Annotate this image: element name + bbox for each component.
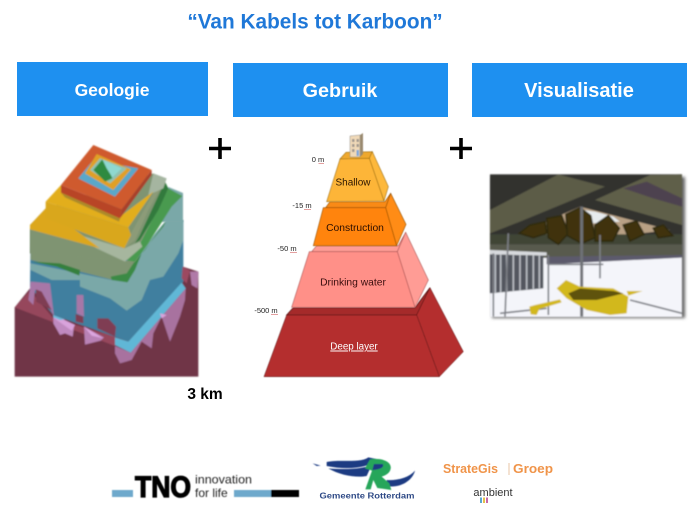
logo: StrateGis Groep: StrateGis (443, 462, 498, 476)
depth label: -15 m: -15 m (292, 201, 312, 210)
depth label: -50 m: -50 m (277, 244, 297, 253)
panel header: Geologie (17, 62, 208, 116)
visualisation screenshot (490, 174, 685, 318)
logo: Gemeente Rotterdam (313, 457, 415, 500)
layer: construction (313, 193, 406, 246)
layer: shallow (327, 152, 388, 202)
panel header: Gebruik (233, 63, 448, 117)
logo: TNO innovation for life (112, 471, 299, 504)
panel header: Gebruik: Gebruik (303, 80, 378, 102)
logo: TNO innovation for life: innovation (195, 472, 252, 486)
upper strata (30, 145, 183, 262)
panel header: Visualisatie: Visualisatie (524, 80, 634, 102)
title: “Van Kabels tot Karboon” (187, 10, 443, 34)
logo: ambient: ambient (473, 487, 513, 499)
label: Shallow: Shallow (335, 178, 371, 188)
icon: building (350, 133, 363, 157)
usage pyramid (254, 133, 463, 377)
logo: TNO innovation for life: for life (195, 486, 228, 500)
label: Construction: Construction (326, 223, 384, 234)
logo: StrateGis Groep: Groep (513, 462, 553, 476)
panel header: Visualisatie (472, 63, 687, 117)
logo: TNO innovation for life: TNO (135, 471, 191, 504)
depth label: 0 m: 0 m (312, 155, 324, 164)
depth label: -500 m: -500 m (254, 306, 278, 315)
logo: StrateGis Groep (443, 462, 553, 476)
layer: drinking water (292, 232, 428, 307)
layer: deep (264, 288, 463, 377)
label: Deep layer: Deep layer (330, 342, 378, 352)
plus sign 2 (450, 138, 472, 159)
lower strata and base (15, 220, 198, 377)
plus sign 1 (209, 138, 231, 159)
scale label: 3 km: 3 km (187, 386, 223, 403)
geology block diagram (15, 145, 198, 377)
logo: Gemeente Rotterdam: Gemeente Rotterdam (320, 492, 414, 500)
panel header: Geologie: Geologie (75, 80, 150, 100)
label: Drinking water: Drinking water (320, 278, 386, 288)
